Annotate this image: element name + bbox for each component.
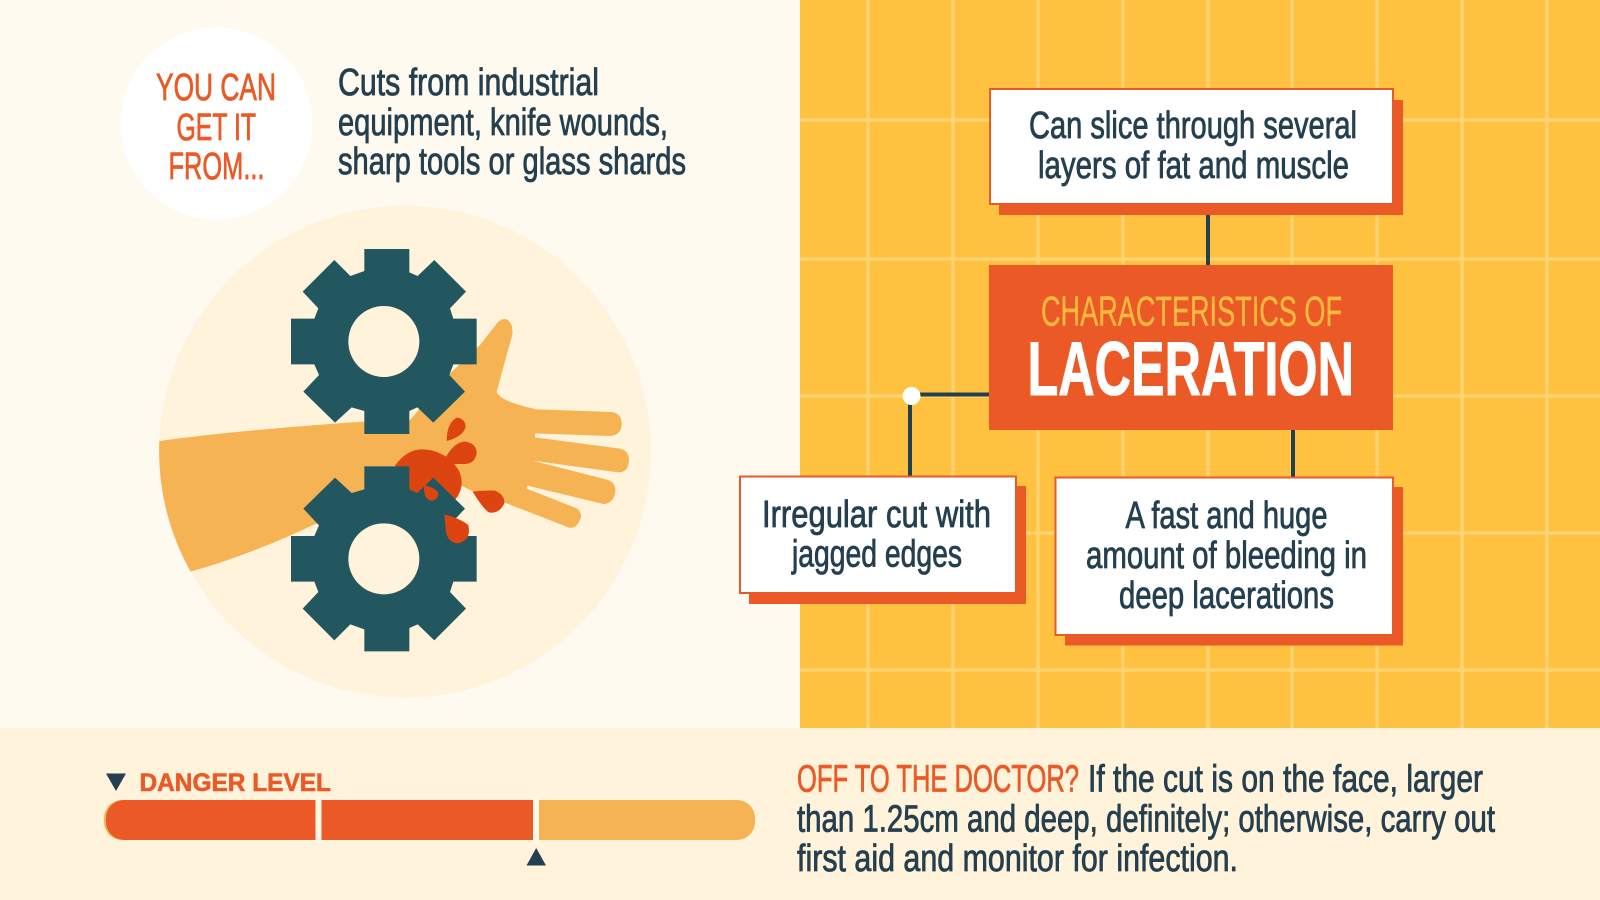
callout: you can get it from: FROM... <box>168 146 264 188</box>
text block: causes: equipment, knife wounds, <box>338 102 668 144</box>
panel: yellow grid background <box>800 0 1600 728</box>
text block: off to the doctor: OFF TO THE DOCTOR? <box>797 758 1079 800</box>
panel: bottom band <box>0 728 1600 900</box>
icon: level marker <box>526 848 546 866</box>
illustration: arm caught in gears <box>159 206 651 698</box>
icon: arm and hand <box>159 319 629 572</box>
box: slice through layers <box>990 89 1403 215</box>
icon: bottom gear <box>291 466 477 651</box>
text block: off to the doctor: If the cut is on the face, larger <box>1088 758 1483 800</box>
icon: top gear <box>291 249 477 434</box>
icon: blood splash <box>395 442 477 500</box>
connector lines <box>908 214 1295 477</box>
icon: blood drops <box>424 418 504 543</box>
box: slice through layers: layers of fat and muscle <box>1038 145 1349 187</box>
icon: down triangle <box>106 774 126 791</box>
box: bleeding: amount of bleeding in <box>1086 535 1367 577</box>
connector dot <box>902 387 920 405</box>
box: irregular cut: Irregular cut with <box>762 494 991 536</box>
bar <box>104 798 755 842</box>
box: irregular cut <box>740 476 1026 604</box>
box: bleeding: deep lacerations <box>1119 575 1334 617</box>
title box: characteristics of laceration <box>989 265 1393 430</box>
title box: characteristics of laceration: CHARACTERISTICS OF <box>1041 288 1342 334</box>
callout: you can get it from: GET IT <box>176 107 256 149</box>
text block: off to the doctor: first aid and monitor for infection. <box>797 838 1238 880</box>
box: bleeding: A fast and huge <box>1126 495 1328 537</box>
danger level meter <box>104 769 755 866</box>
title box: characteristics of laceration: LACERATION <box>1028 327 1354 412</box>
text block: off to the doctor <box>797 758 1495 880</box>
callout: you can get it from <box>120 28 312 220</box>
text block: causes: sharp tools or glass shards <box>338 141 686 183</box>
box: slice through layers: Can slice through several <box>1029 105 1357 147</box>
box: irregular cut: jagged edges <box>791 534 962 576</box>
text block: causes <box>338 62 686 183</box>
text block: causes: Cuts from industrial <box>338 62 599 104</box>
danger label: DANGER LEVEL <box>140 769 331 797</box>
callout: you can get it from: YOU CAN <box>156 67 276 109</box>
box: bleeding <box>1056 478 1403 646</box>
panel: left background <box>0 0 800 728</box>
